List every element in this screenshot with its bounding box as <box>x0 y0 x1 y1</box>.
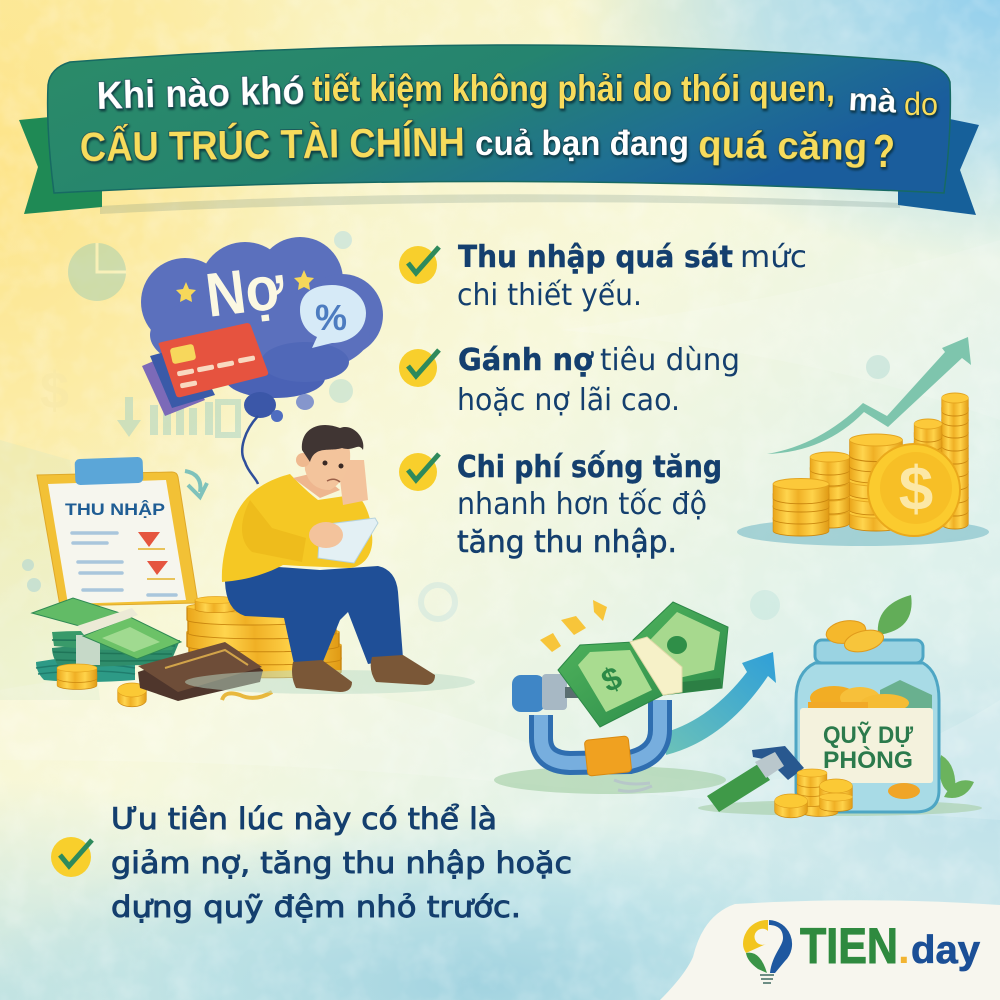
side leaves <box>940 755 974 798</box>
faded icons behind illustration <box>22 231 890 620</box>
bundle of money <box>558 602 728 727</box>
rising arrow <box>663 652 776 755</box>
logo panel <box>660 900 1000 1000</box>
coin pile <box>774 769 852 818</box>
paper receipt <box>318 518 378 563</box>
bottom callout <box>51 802 572 924</box>
thought string <box>242 416 258 484</box>
jar label <box>800 708 933 783</box>
title line 2 <box>79 119 895 177</box>
cash stack <box>32 598 181 682</box>
faded pie chart <box>68 243 126 301</box>
item 2 text: Gánh nợ <box>458 343 594 378</box>
down markers <box>138 532 175 579</box>
arm sleeve <box>242 500 306 562</box>
ground shadow <box>737 518 989 546</box>
stars <box>176 270 314 302</box>
orange collar <box>584 736 632 776</box>
text: THU NHẬP: THU NHẬP <box>65 500 165 519</box>
item 1 text: chi thiết yếu. <box>457 278 642 313</box>
bulb icon <box>743 920 792 983</box>
title line 1: Khi nào khó <box>96 70 305 118</box>
label text: PHÒNG <box>823 746 913 774</box>
title line 2: ? <box>873 125 895 177</box>
title line 2: quá căng <box>698 124 868 169</box>
text: Nợ: Nợ <box>202 253 289 331</box>
clip <box>75 457 143 485</box>
curved arrow <box>185 471 207 497</box>
faded down arrow and bars <box>117 397 238 437</box>
logo text: . <box>898 925 910 972</box>
growth arrow <box>767 337 971 454</box>
growth coins illustration <box>737 337 989 546</box>
percent speech bubble: % <box>315 297 347 338</box>
sweater <box>222 474 372 582</box>
big dollar coin: $ <box>899 455 933 524</box>
logo text: day <box>911 929 980 972</box>
clipboard board <box>37 472 198 606</box>
ground shadow <box>494 766 726 794</box>
item 3 text <box>457 450 722 560</box>
faded dollar: $ <box>40 362 69 420</box>
squeezed cash in clamp <box>494 600 776 794</box>
logo text <box>800 918 980 974</box>
right ribbon tail <box>898 117 979 215</box>
bundle of money: $ <box>596 659 627 699</box>
stars <box>540 600 607 652</box>
panel shape <box>660 900 1000 1000</box>
item 1 text: Thu nhập quá sát <box>458 240 733 275</box>
cloud shape <box>141 237 383 398</box>
callout text: giảm nợ, tăng thu nhập hoặc <box>111 846 572 880</box>
item 2 text: tiêu dùng <box>600 343 740 378</box>
raised arm <box>340 460 368 505</box>
item 3 text: Chi phí sống tăng <box>457 450 722 485</box>
clamp frame <box>541 700 660 763</box>
title line 1 <box>96 68 938 122</box>
neck <box>293 472 340 498</box>
title line 2: cuả bạn đang <box>475 124 689 163</box>
item 3 text: nhanh hơn tốc độ <box>457 487 707 522</box>
jar neck <box>815 640 923 663</box>
title line 1: do <box>904 86 938 122</box>
label text: QUỸ DỰ <box>823 721 913 749</box>
credit cards <box>142 323 268 416</box>
small coins <box>57 664 146 707</box>
jar body <box>796 663 939 812</box>
hand <box>309 522 343 548</box>
screw <box>512 674 595 712</box>
item 1 text: mức <box>740 240 807 275</box>
wrench bits <box>614 780 652 791</box>
banner body <box>48 45 950 193</box>
text lines <box>72 533 176 595</box>
logo text: TIEN <box>800 918 898 974</box>
title line 1: tiết kiệm không phải do thói quen, <box>312 68 835 109</box>
title line 1: mà <box>848 81 898 120</box>
checklist <box>399 240 807 560</box>
paper scrap <box>222 692 272 700</box>
pants <box>225 566 403 664</box>
hair <box>302 425 363 462</box>
left ribbon tail <box>19 116 102 214</box>
callout text <box>111 802 572 924</box>
top leaf <box>878 595 912 635</box>
item 1 <box>399 240 807 313</box>
clipboard: income <box>37 457 207 606</box>
thought bubbles <box>244 392 314 422</box>
item 1 text <box>457 240 807 313</box>
coins in jar <box>808 618 909 712</box>
check icon <box>399 246 439 284</box>
coin in jar bottom <box>888 783 920 799</box>
big dollar coin <box>868 444 960 536</box>
emergency fund jar <box>698 595 982 818</box>
item 3 <box>399 450 722 560</box>
thought cloud: debt <box>141 237 383 484</box>
item 3 text: tăng thu nhập. <box>457 525 677 560</box>
check icon <box>51 837 92 877</box>
label text <box>823 721 913 774</box>
check icon <box>399 349 439 387</box>
check icon <box>399 453 439 491</box>
red card <box>158 323 268 397</box>
paper <box>48 480 186 604</box>
title line 2: CẤU TRÚC TÀI CHÍNH <box>79 119 465 170</box>
item 2 text <box>457 343 740 418</box>
face <box>303 428 350 490</box>
gold coins seat <box>187 596 341 678</box>
worried man <box>185 425 475 694</box>
item 2 text: hoặc nợ lãi cao. <box>457 383 680 418</box>
shoes <box>292 655 435 692</box>
wallet <box>138 642 272 701</box>
coin stacks <box>773 393 968 536</box>
banner ribbon <box>19 45 979 215</box>
callout text: Ưu tiên lúc này có thể là <box>111 802 497 836</box>
callout text: dựng quỹ đệm nhỏ trước. <box>111 890 521 924</box>
item 2 <box>399 343 740 418</box>
hammer <box>707 746 804 812</box>
percent speech bubble <box>300 285 366 348</box>
